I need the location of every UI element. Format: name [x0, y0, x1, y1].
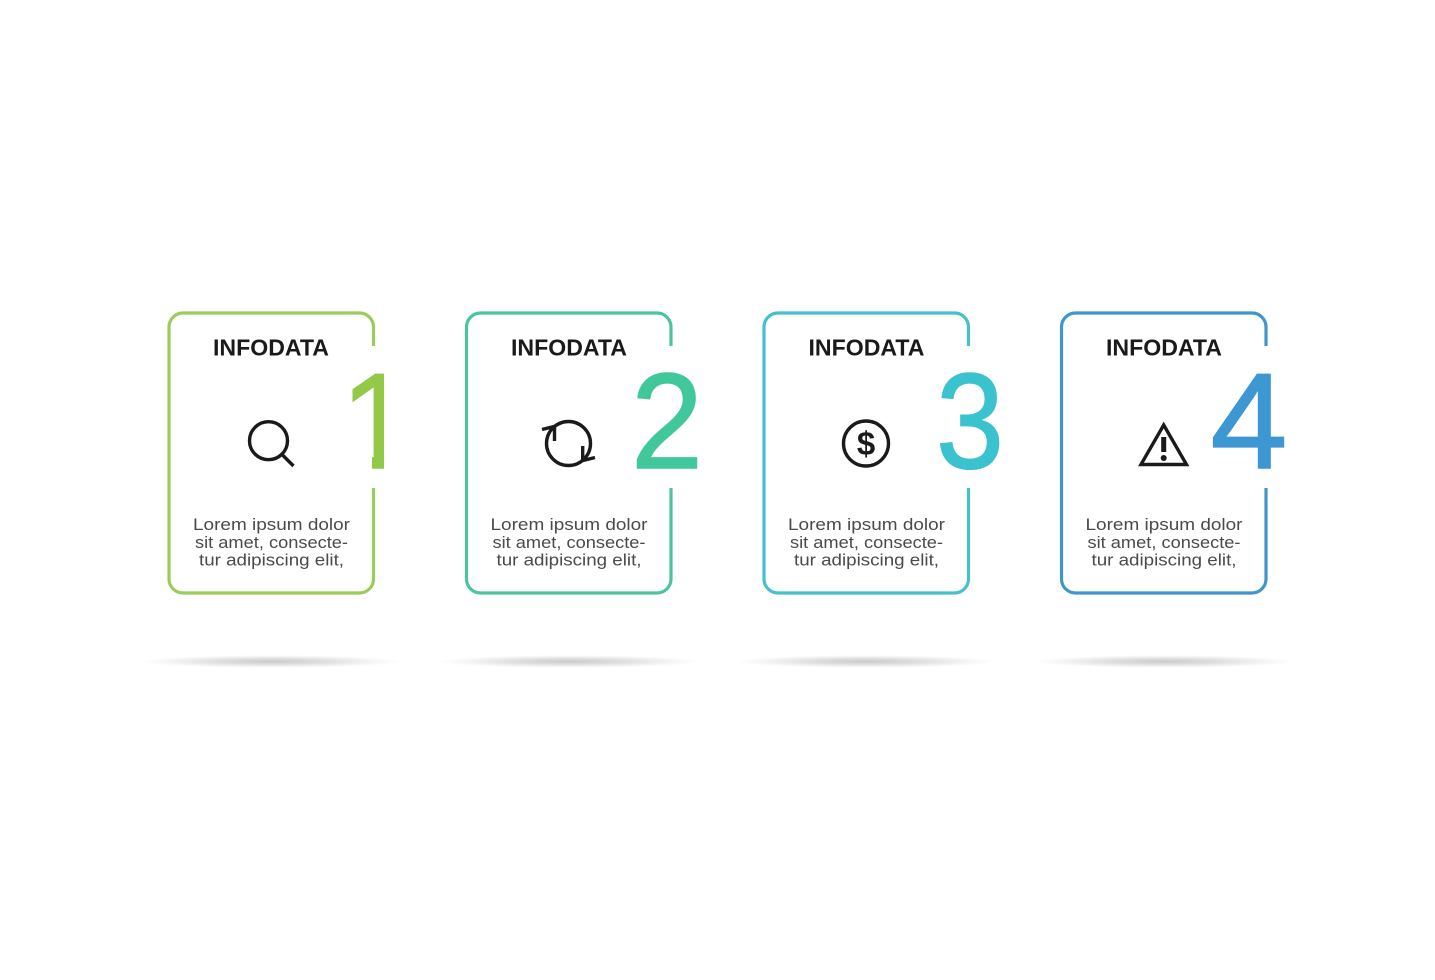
card 1 text: Lorem ipsum dolor — [193, 515, 350, 534]
card 2 number: 2 — [631, 345, 703, 497]
card 1 outline — [169, 313, 374, 593]
card 4 text: tur adipiscing elit, — [1092, 550, 1236, 570]
card 1 number: 1 — [340, 345, 416, 497]
icon: refresh arrows — [542, 422, 595, 466]
card 3 text — [788, 515, 945, 570]
card 2 outline — [466, 313, 671, 593]
card 4 number: 4 — [1210, 345, 1288, 497]
panel: card 3 — [764, 313, 1004, 593]
card 1 text: sit amet, consecte- — [195, 533, 348, 552]
card 3 heading: INFODATA — [808, 334, 924, 360]
card 4 text: Lorem ipsum dolor — [1086, 515, 1243, 534]
card 2 text: tur adipiscing elit, — [496, 550, 642, 570]
card 4 text: sit amet, consecte- — [1088, 533, 1240, 552]
card 4 heading: INFODATA — [1106, 334, 1222, 360]
card 3 text: sit amet, consecte- — [790, 533, 943, 552]
card 3 number: 3 — [936, 345, 1004, 497]
card 2 text: sit amet, consecte- — [492, 533, 646, 552]
panel: card 4 — [1062, 313, 1288, 593]
card 4 outline — [1062, 313, 1266, 593]
icon: magnifier — [250, 422, 294, 466]
icon: dollar coin — [844, 421, 888, 466]
icon: dollar coin: $ — [857, 425, 875, 462]
card 3 text: tur adipiscing elit, — [794, 550, 939, 570]
card 1 text: tur adipiscing elit, — [199, 550, 344, 570]
panel: card 2 — [466, 313, 703, 593]
card 3 text: Lorem ipsum dolor — [788, 515, 945, 534]
card 2 text — [490, 515, 648, 570]
card 1 heading: INFODATA — [213, 334, 329, 360]
drop shadows — [141, 655, 1294, 668]
card 2 heading: INFODATA — [511, 334, 627, 360]
card 2 text: Lorem ipsum dolor — [490, 515, 648, 534]
panel: card 1 — [167, 311, 384, 595]
card 3 outline — [764, 313, 968, 593]
card 1 text — [193, 515, 350, 570]
icon: warning triangle — [1141, 425, 1186, 464]
card 4 text — [1086, 515, 1243, 570]
